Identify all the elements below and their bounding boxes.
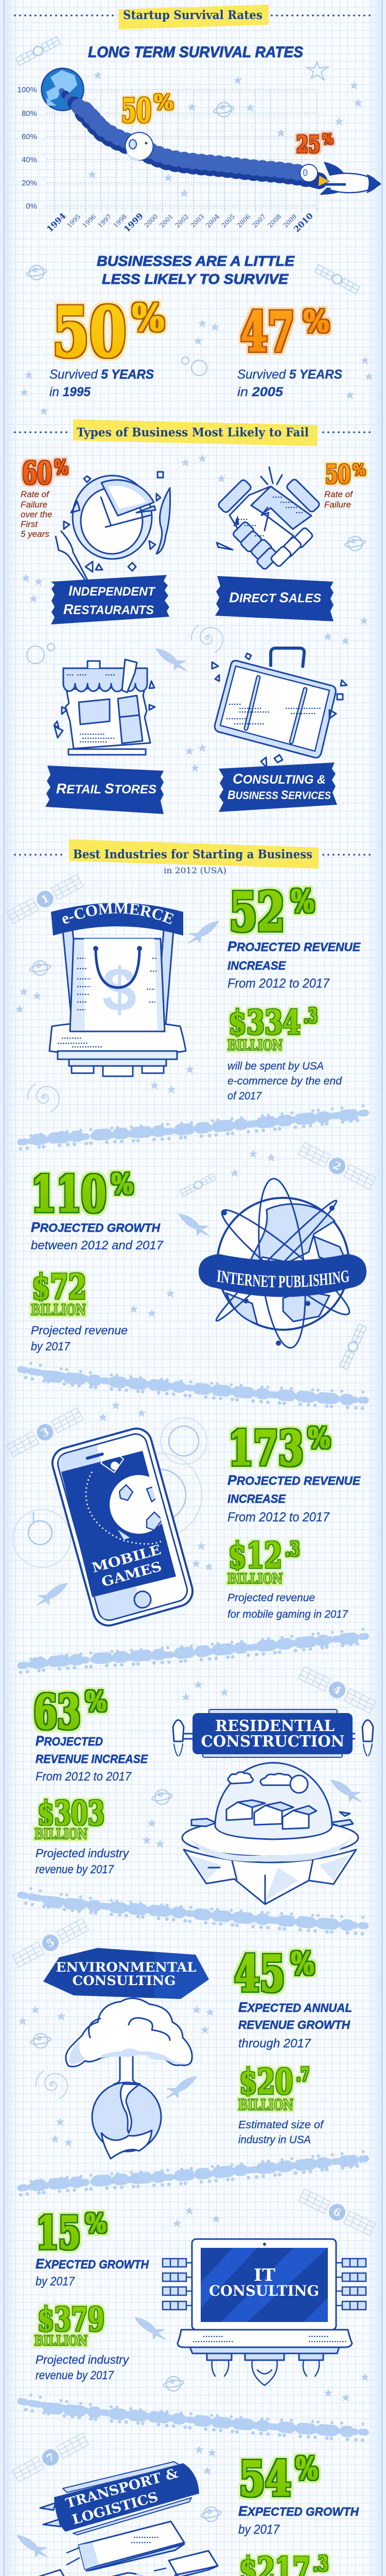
icon: shopping bag kiosk: $ <box>102 955 136 1024</box>
x axis year labels: 2002 <box>174 213 190 229</box>
stat: $20.7: $20 <box>239 2061 293 2102</box>
icon: rocket <box>318 162 380 195</box>
callout: 60% failure rate: 60 <box>22 455 52 492</box>
x axis year labels: 1995 <box>66 213 82 229</box>
text: estimated size <box>238 2119 324 2146</box>
text: rate of failure <box>324 489 354 510</box>
label: billion: BILLION <box>34 1826 87 1842</box>
sign: internet publishing: INTERNET PUBLISHING <box>217 1270 349 1287</box>
text: expected annual revenue growth <box>238 1999 352 2050</box>
sign: environmental consulting: ENVIRONMENTAL <box>56 1960 197 1975</box>
text: projected revenue increase: INCREASE <box>227 959 286 972</box>
item 2: internet publishing <box>29 1142 376 1353</box>
asteroid belt <box>21 1629 369 1672</box>
stat: 52%: % <box>291 883 314 919</box>
text: projected revenue for mobile gaming <box>227 1592 348 1620</box>
text: will be spent <box>227 1060 342 1102</box>
text: rate of failure: First <box>21 519 38 529</box>
banner: consulting and business services <box>219 762 337 812</box>
banner text: BUSINESS SERVICES <box>227 788 331 802</box>
asteroid belt <box>21 2395 369 2441</box>
x axis year labels: 2006 <box>236 213 252 229</box>
stat: 50% survived in 1995 <box>49 292 165 399</box>
stat: $334.3: $334 <box>229 1003 301 1042</box>
icon: globe with orbits <box>212 1177 357 1350</box>
icon: mushroom cloud over globe <box>66 1998 192 2159</box>
item 1: e-commerce <box>6 874 361 1119</box>
text: projected industry revenue: revenue by 2017 <box>36 2368 114 2382</box>
stat: $379: $379 <box>38 2300 104 2339</box>
item 5: environmental consulting <box>12 1917 352 2159</box>
text: expected growth: EXPECTED GROWTH <box>238 2503 359 2519</box>
text: projected revenue increase <box>227 1472 361 1524</box>
chart: long term survival <box>17 68 380 234</box>
text: rate of failure: Rate of <box>21 489 50 499</box>
heading: businesses less likely to survive: LESS LIKELY TO SURVIVE <box>102 271 289 287</box>
banner text <box>227 771 331 802</box>
icon: flying trains <box>20 2521 218 2576</box>
text: projected growth: PROJECTED GROWTH <box>31 1219 160 1235</box>
panel: direct sales <box>215 459 365 621</box>
text: rate of failure: Failure <box>21 500 47 510</box>
stat: 47% survived in 2005: % <box>304 304 329 339</box>
text: projected industry revenue: Projected industry <box>36 1846 129 1860</box>
rank badge 1: 1 <box>39 892 51 906</box>
panel: retail stores <box>45 659 164 814</box>
section heading: best industries <box>15 839 372 875</box>
x axis year labels <box>45 211 315 234</box>
callout: 50%: 50 <box>121 91 151 130</box>
icon: phone: MOBILE <box>90 1542 163 1576</box>
text: expected growth: EXPECTED GROWTH <box>36 2256 149 2272</box>
text: projected industry revenue: revenue by 2017 <box>36 1862 114 1876</box>
callout: 25%: 25 <box>296 131 320 158</box>
icon: store front <box>54 659 155 755</box>
rank badge 2: 2 <box>331 1159 343 1173</box>
label: billion: BILLION <box>238 2096 293 2113</box>
stat: 173%: 173 <box>229 1420 304 1477</box>
item 4: residential construction <box>34 1665 376 1904</box>
sign: e-commerce <box>51 903 183 936</box>
item 3: mobile games <box>6 1406 361 1629</box>
stat: 47% survived in 2005: in 2005 <box>237 385 284 399</box>
y axis labels: 0% <box>26 202 37 211</box>
icon: phone: GAMES <box>100 1559 164 1590</box>
icon: plate, fork and knife <box>56 472 170 581</box>
text: projected revenue: Projected revenue <box>31 1324 128 1337</box>
banner text: RESTAURANTS <box>63 601 154 617</box>
text: estimated size: Estimated size of <box>238 2119 324 2131</box>
asteroid belt <box>21 1889 369 1934</box>
text: projected industry revenue <box>36 2353 129 2382</box>
rank badge 3: 3 <box>39 1425 51 1439</box>
x axis year labels: 1998 <box>112 213 128 229</box>
callout: 25%: % <box>323 132 333 147</box>
text: projected revenue for mobile gaming: for mobile gaming in 2017 <box>227 1608 348 1620</box>
icon: flying laptop <box>163 2239 366 2385</box>
rank badge 1 <box>6 873 84 925</box>
text: expected annual revenue growth: EXPECTED ANNUAL <box>238 1999 352 2015</box>
sign: environmental consulting: CONSULTING <box>72 1973 176 1988</box>
text: rate of failure: Failure <box>324 500 351 510</box>
stat: 47% survived in 2005: 47 <box>241 300 294 365</box>
rank badge 7: 7 <box>44 2450 57 2465</box>
smoke trail <box>59 88 319 181</box>
stat: 47% survived in 2005: Survived 5 YEARS <box>237 367 342 382</box>
x axis year labels: 2010 <box>292 211 315 234</box>
decorative satellites <box>15 36 367 1370</box>
stat: $303: $303 <box>38 1794 104 1833</box>
y axis labels: 40% <box>22 156 37 164</box>
section heading: best industries: Best Industries for Starting a Business <box>73 848 312 861</box>
sign: e-commerce: e-COMMERCE <box>62 903 174 924</box>
stat: $72: $72 <box>32 1267 86 1307</box>
text: rate of failure: 5 years <box>21 529 49 539</box>
rank badge 6 <box>298 2188 376 2237</box>
text: rate of failure: over the <box>21 510 52 519</box>
text: expected growth: by 2017 <box>36 2275 75 2289</box>
asteroid belt <box>21 1106 369 1149</box>
decorative spirals and bubbles <box>27 357 223 2099</box>
x axis year labels: 1994 <box>45 211 68 234</box>
callout: 60% failure rate: % <box>55 456 68 479</box>
rank badge 4: 4 <box>331 1683 343 1697</box>
text: will be spent: of 2017 <box>227 1090 262 1102</box>
section heading: best industries: in 2012 (USA) <box>164 866 226 875</box>
banner text: RETAIL STORES <box>56 781 156 796</box>
label: billion: BILLION <box>31 1301 86 1318</box>
banner text: DIRECT SALES <box>229 589 321 605</box>
stat: 54%: 54 <box>239 2450 291 2507</box>
callout: 50% failure rate: 50 <box>325 459 350 489</box>
text: expected annual revenue growth: REVENUE GROWTH <box>238 2018 350 2031</box>
text: rate of failure <box>21 489 52 539</box>
text: projected growth <box>31 1219 164 1252</box>
sign: residential construction <box>173 1709 373 1757</box>
banner text <box>63 583 156 617</box>
banner text: CONSULTING & <box>233 771 326 787</box>
text: expected growth <box>238 2503 359 2537</box>
text: projected revenue increase: PROJECTED REVENUE <box>227 1472 361 1488</box>
label: billion: BILLION <box>227 1038 283 1054</box>
stat: 110%: 110 <box>31 1165 106 1223</box>
text: projected growth: between 2012 and 2017 <box>31 1239 164 1252</box>
heading: long term survival rates: LONG TERM SURVIVAL RATES <box>88 44 303 61</box>
heading: businesses less likely to survive: BUSINESSES ARE A LITTLE <box>97 253 295 269</box>
section heading: types of business: Types of Business Most Likely to Fail <box>77 426 309 439</box>
banner: independent restaurants <box>51 575 169 624</box>
text: will be spent: will be spent by USA <box>227 1060 324 1072</box>
text: rate of failure: Rate of <box>324 489 354 499</box>
text: projected revenue increase: REVENUE INCREASE <box>36 1752 148 1766</box>
y axis labels: 100% <box>17 86 37 94</box>
text: projected revenue increase <box>227 939 361 991</box>
banner: direct sales <box>215 576 334 621</box>
icon: floating island with houses <box>182 1762 358 1904</box>
text: estimated size: industry in USA <box>238 2134 311 2146</box>
stat: 63%: 63 <box>34 1685 80 1739</box>
rank badge 6: 6 <box>331 2205 343 2219</box>
x axis year labels: 2000 <box>143 213 159 229</box>
icon: shopping bag kiosk <box>49 930 186 1076</box>
stat: 50% survived in 1995: % <box>132 296 165 339</box>
text: projected revenue increase: From 2012 to 2017 <box>227 976 330 991</box>
icon: suitcase <box>212 648 347 768</box>
label: billion: BILLION <box>227 1571 283 1587</box>
sign: transport and logistics <box>40 2462 199 2535</box>
section heading: startup survival rates: Startup Survival Rates <box>123 8 262 22</box>
label: billion: BILLION <box>34 2333 87 2349</box>
text: projected revenue increase: INCREASE <box>227 1492 286 1505</box>
panel: independent restaurants <box>21 455 170 624</box>
rank badge 3 <box>6 1406 84 1458</box>
x axis year labels: 2007 <box>251 213 267 229</box>
text: projected revenue increase: PROJECTED <box>36 1733 103 1749</box>
text: projected revenue <box>31 1324 128 1353</box>
text: projected revenue increase <box>36 1733 148 1784</box>
stat: $20.7: .7 <box>296 2064 309 2086</box>
text: projected revenue for mobile gaming: Projected revenue <box>227 1592 315 1604</box>
icon: earth <box>41 68 83 110</box>
asteroid belt <box>21 1363 369 1409</box>
icon: flying laptop: CONSULTING <box>209 2282 319 2299</box>
text: projected revenue: by 2017 <box>31 1340 71 1353</box>
decorative game rings <box>13 1418 207 1567</box>
chart grid <box>47 90 317 212</box>
text: expected growth <box>36 2256 149 2289</box>
stat: $334.3: .3 <box>304 1004 318 1028</box>
rank badge 4 <box>298 1665 376 1715</box>
text: projected revenue increase: From 2012 to 2017 <box>36 1770 132 1784</box>
stat: $12.3: .3 <box>285 1537 300 1561</box>
sign: internet publishing <box>199 1254 366 1297</box>
rank badge 5 <box>12 1917 89 1969</box>
heading: businesses less likely to survive <box>97 253 295 287</box>
icon: small moon near rocket <box>300 164 318 182</box>
panel: consulting and business services <box>212 648 347 812</box>
stat: $217.3: .3 <box>313 2552 328 2576</box>
text: expected growth: by 2017 <box>238 2522 280 2537</box>
y axis labels: 80% <box>22 109 37 118</box>
stat: 173%: % <box>308 1422 330 1454</box>
callout: 50% failure rate: % <box>353 461 365 479</box>
text: expected annual revenue growth: through 2017 <box>238 2037 312 2050</box>
decorative rockets <box>17 649 362 2557</box>
y axis labels: 60% <box>22 132 37 141</box>
stat: 52%: 52 <box>230 880 285 944</box>
sign: transport and logistics: TRANSPORT & <box>64 2466 180 2512</box>
icon: broken handshake <box>217 467 321 570</box>
x axis year labels: 1999 <box>122 211 145 234</box>
x axis year labels: 2004 <box>205 213 221 229</box>
item 6: it consulting <box>34 2188 376 2385</box>
text: will be spent: e-commerce by the end <box>227 1075 342 1087</box>
x axis year labels: 2009 <box>282 213 298 229</box>
sign: environmental consulting <box>43 1948 209 1999</box>
x axis year labels: 2008 <box>267 213 283 229</box>
icon: flying laptop: IT <box>254 2265 275 2285</box>
x axis year labels: 1996 <box>81 213 97 229</box>
stat: 54%: % <box>295 2450 318 2486</box>
stat: 15%: 15 <box>36 2206 80 2260</box>
stat: 15%: % <box>85 2208 106 2238</box>
stat: 47% survived in 2005 <box>237 300 342 399</box>
rank badge 5: 5 <box>44 1936 57 1950</box>
rank badge 2 <box>298 1141 376 1191</box>
x axis year labels: 2005 <box>220 213 236 229</box>
stat: 50% survived in 1995: Survived 5 YEARS <box>49 367 154 382</box>
text: projected industry revenue <box>36 1846 129 1876</box>
rank badge 7 <box>12 2432 89 2483</box>
sign: transport and logistics: LOGISTICS <box>71 2489 160 2528</box>
stat: 50% survived in 1995: in 1995 <box>49 385 91 399</box>
text: projected industry revenue: Projected industry <box>36 2353 129 2366</box>
x axis year labels: 2001 <box>159 213 174 229</box>
icon: moon <box>126 132 153 161</box>
y axis labels: 20% <box>22 179 37 188</box>
stat: 50% survived in 1995: 50 <box>52 292 127 373</box>
stat: 45%: % <box>291 1945 314 1981</box>
text: projected revenue increase: From 2012 to 2017 <box>227 1510 330 1524</box>
stat: 110%: % <box>111 1168 133 1200</box>
section heading: types of business <box>15 419 372 446</box>
banner: retail stores <box>45 766 164 814</box>
banner text: INDEPENDENT <box>68 583 156 599</box>
item 7: transport and logistics <box>12 2432 359 2576</box>
asteroid belt <box>21 2151 369 2195</box>
callout: 50%: % <box>154 91 173 114</box>
x axis year labels: 2003 <box>189 213 205 229</box>
icon: phone <box>49 1425 196 1629</box>
stat: $12.3: $12 <box>229 1535 282 1577</box>
section heading: startup survival rates <box>15 5 372 29</box>
sign: residential construction: RESIDENTIAL <box>215 1717 335 1735</box>
x axis year labels: 1997 <box>97 213 113 229</box>
stat: 45%: 45 <box>235 1944 285 2003</box>
sign: residential construction: CONSTRUCTION <box>201 1733 345 1751</box>
stat: 63%: % <box>85 1687 106 1718</box>
text: projected revenue increase: PROJECTED REVENUE <box>227 939 361 954</box>
y axis labels <box>17 86 37 211</box>
